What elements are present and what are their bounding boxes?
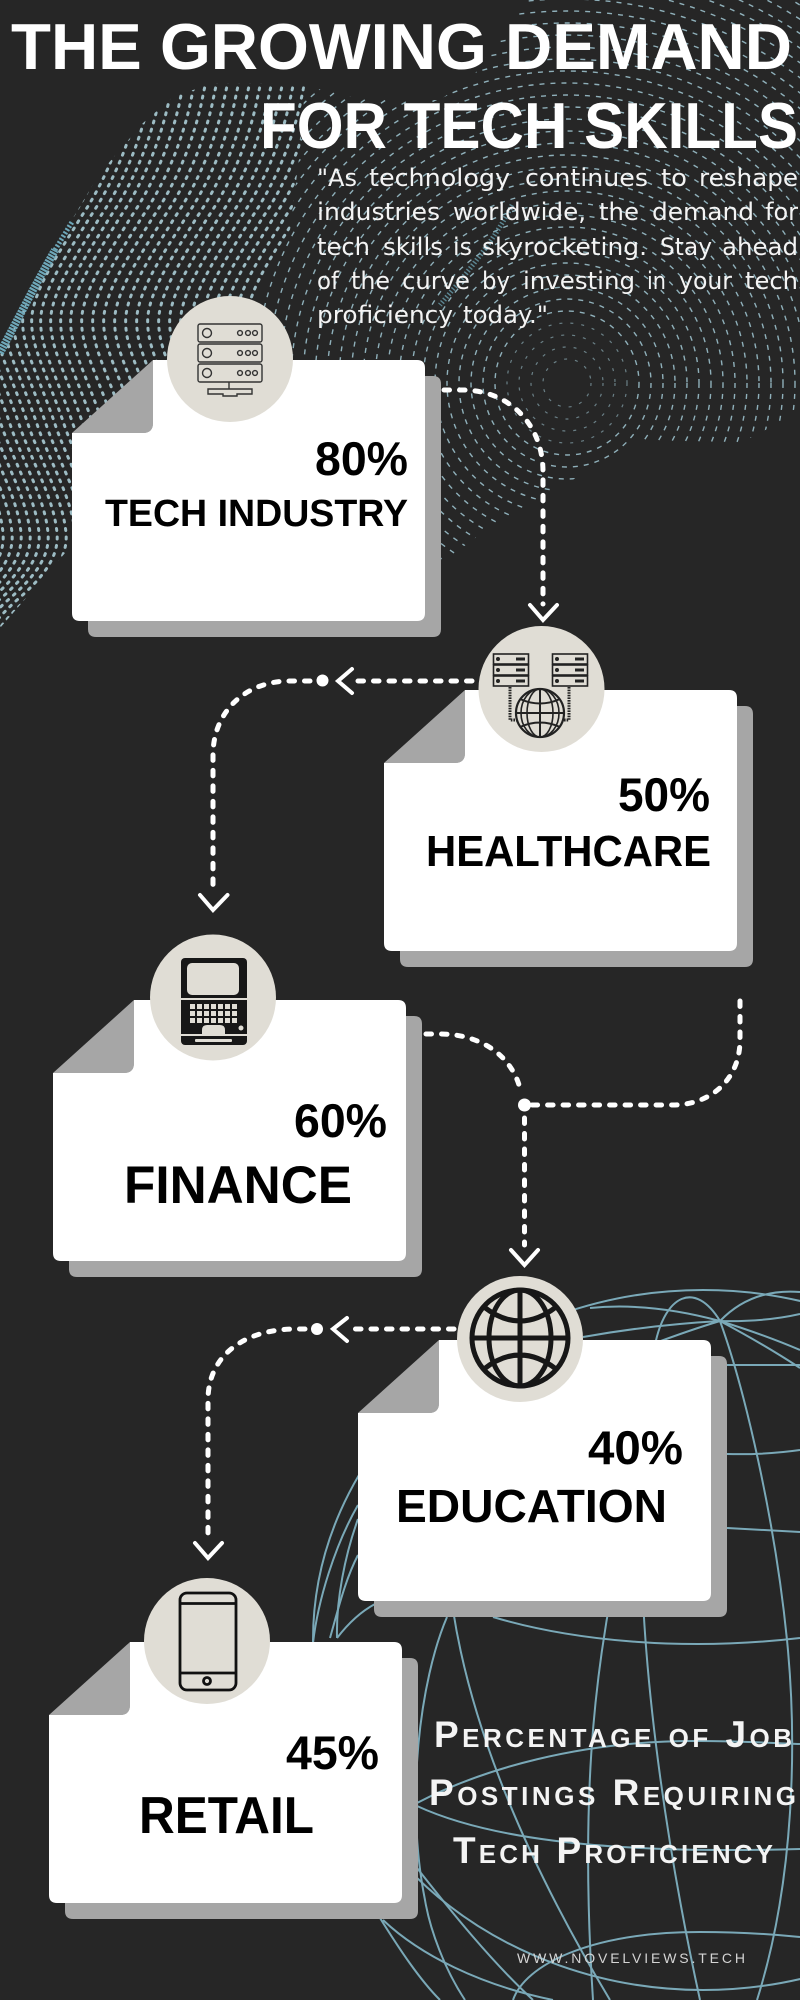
- intro paragraph: today.": [463, 301, 548, 329]
- intro paragraph: the: [351, 267, 390, 295]
- panel: finance: [53, 1000, 422, 1277]
- intro paragraph: "As: [317, 164, 357, 192]
- intro paragraph: the: [599, 198, 639, 226]
- panel: healthcare: 50%: [618, 768, 710, 821]
- intro paragraph: for: [765, 198, 798, 226]
- intro paragraph: of: [317, 267, 340, 295]
- arrow: finance and healthcare to education: [426, 1001, 740, 1265]
- icon: smartphone: [144, 1578, 270, 1704]
- dotted wave background: [0, 0, 800, 863]
- panel: tech industry: [72, 360, 441, 637]
- caption: percentage of job postings: Percentage of Job: [434, 1714, 792, 1755]
- globe wireframe background: [313, 1290, 800, 2000]
- arrow: education to retail: [195, 1318, 454, 1558]
- intro paragraph: technology: [369, 164, 510, 192]
- intro paragraph: your: [679, 267, 732, 295]
- panel: tech industry: TECH INDUSTRY: [105, 493, 408, 535]
- intro paragraph: by: [482, 267, 510, 295]
- icon: globe: [457, 1276, 583, 1402]
- title: THE GROWING DEMAND: [11, 10, 792, 83]
- arrow: tech industry to healthcare: [444, 390, 557, 620]
- intro paragraph: in: [647, 267, 666, 295]
- intro paragraph: reshape: [699, 164, 798, 192]
- arrow: healthcare to finance: [200, 669, 472, 910]
- caption: percentage of job postings: Postings Requiring: [429, 1772, 796, 1813]
- intro paragraph: curve: [402, 267, 470, 295]
- panel: education: [358, 1340, 727, 1617]
- caption: percentage of job postings: [429, 1714, 796, 1871]
- intro paragraph: tech: [317, 233, 370, 261]
- intro paragraph: continues: [525, 164, 648, 192]
- footer url: WWW.NOVELVIEWS.TECH: [517, 1950, 745, 1966]
- intro paragraph: investing: [523, 267, 635, 295]
- intro paragraph: worldwide,: [453, 198, 586, 226]
- intro paragraph: [317, 164, 798, 329]
- panel: healthcare: HEALTHCARE: [426, 827, 711, 876]
- intro paragraph: proficiency: [317, 301, 453, 329]
- intro paragraph: demand: [652, 198, 754, 226]
- intro paragraph: to: [661, 164, 687, 192]
- intro paragraph: ahead: [722, 233, 798, 261]
- intro paragraph: Stay: [660, 233, 712, 261]
- panel: education: EDUCATION: [396, 1480, 667, 1532]
- panel: tech industry: 80%: [315, 432, 408, 485]
- panel: retail: RETAIL: [139, 1787, 314, 1845]
- icon: servers linked to globe: [478, 626, 604, 752]
- intro paragraph: is: [453, 233, 472, 261]
- panel: retail: [49, 1642, 418, 1919]
- icon: retro computer: [150, 934, 276, 1060]
- title: [11, 10, 798, 162]
- intro paragraph: skyrocketing.: [482, 233, 647, 261]
- intro paragraph: tech: [745, 267, 798, 295]
- panel: finance: FINANCE: [124, 1156, 352, 1215]
- caption: percentage of job postings: Tech Proficiency: [453, 1830, 773, 1871]
- intro paragraph: industries: [317, 198, 440, 226]
- panel: healthcare: [384, 690, 753, 967]
- panel: education: 40%: [588, 1421, 683, 1474]
- panel: finance: 60%: [294, 1094, 387, 1147]
- intro paragraph: skills: [383, 233, 443, 261]
- icon: server rack: [167, 296, 293, 422]
- panel: retail: 45%: [286, 1726, 379, 1779]
